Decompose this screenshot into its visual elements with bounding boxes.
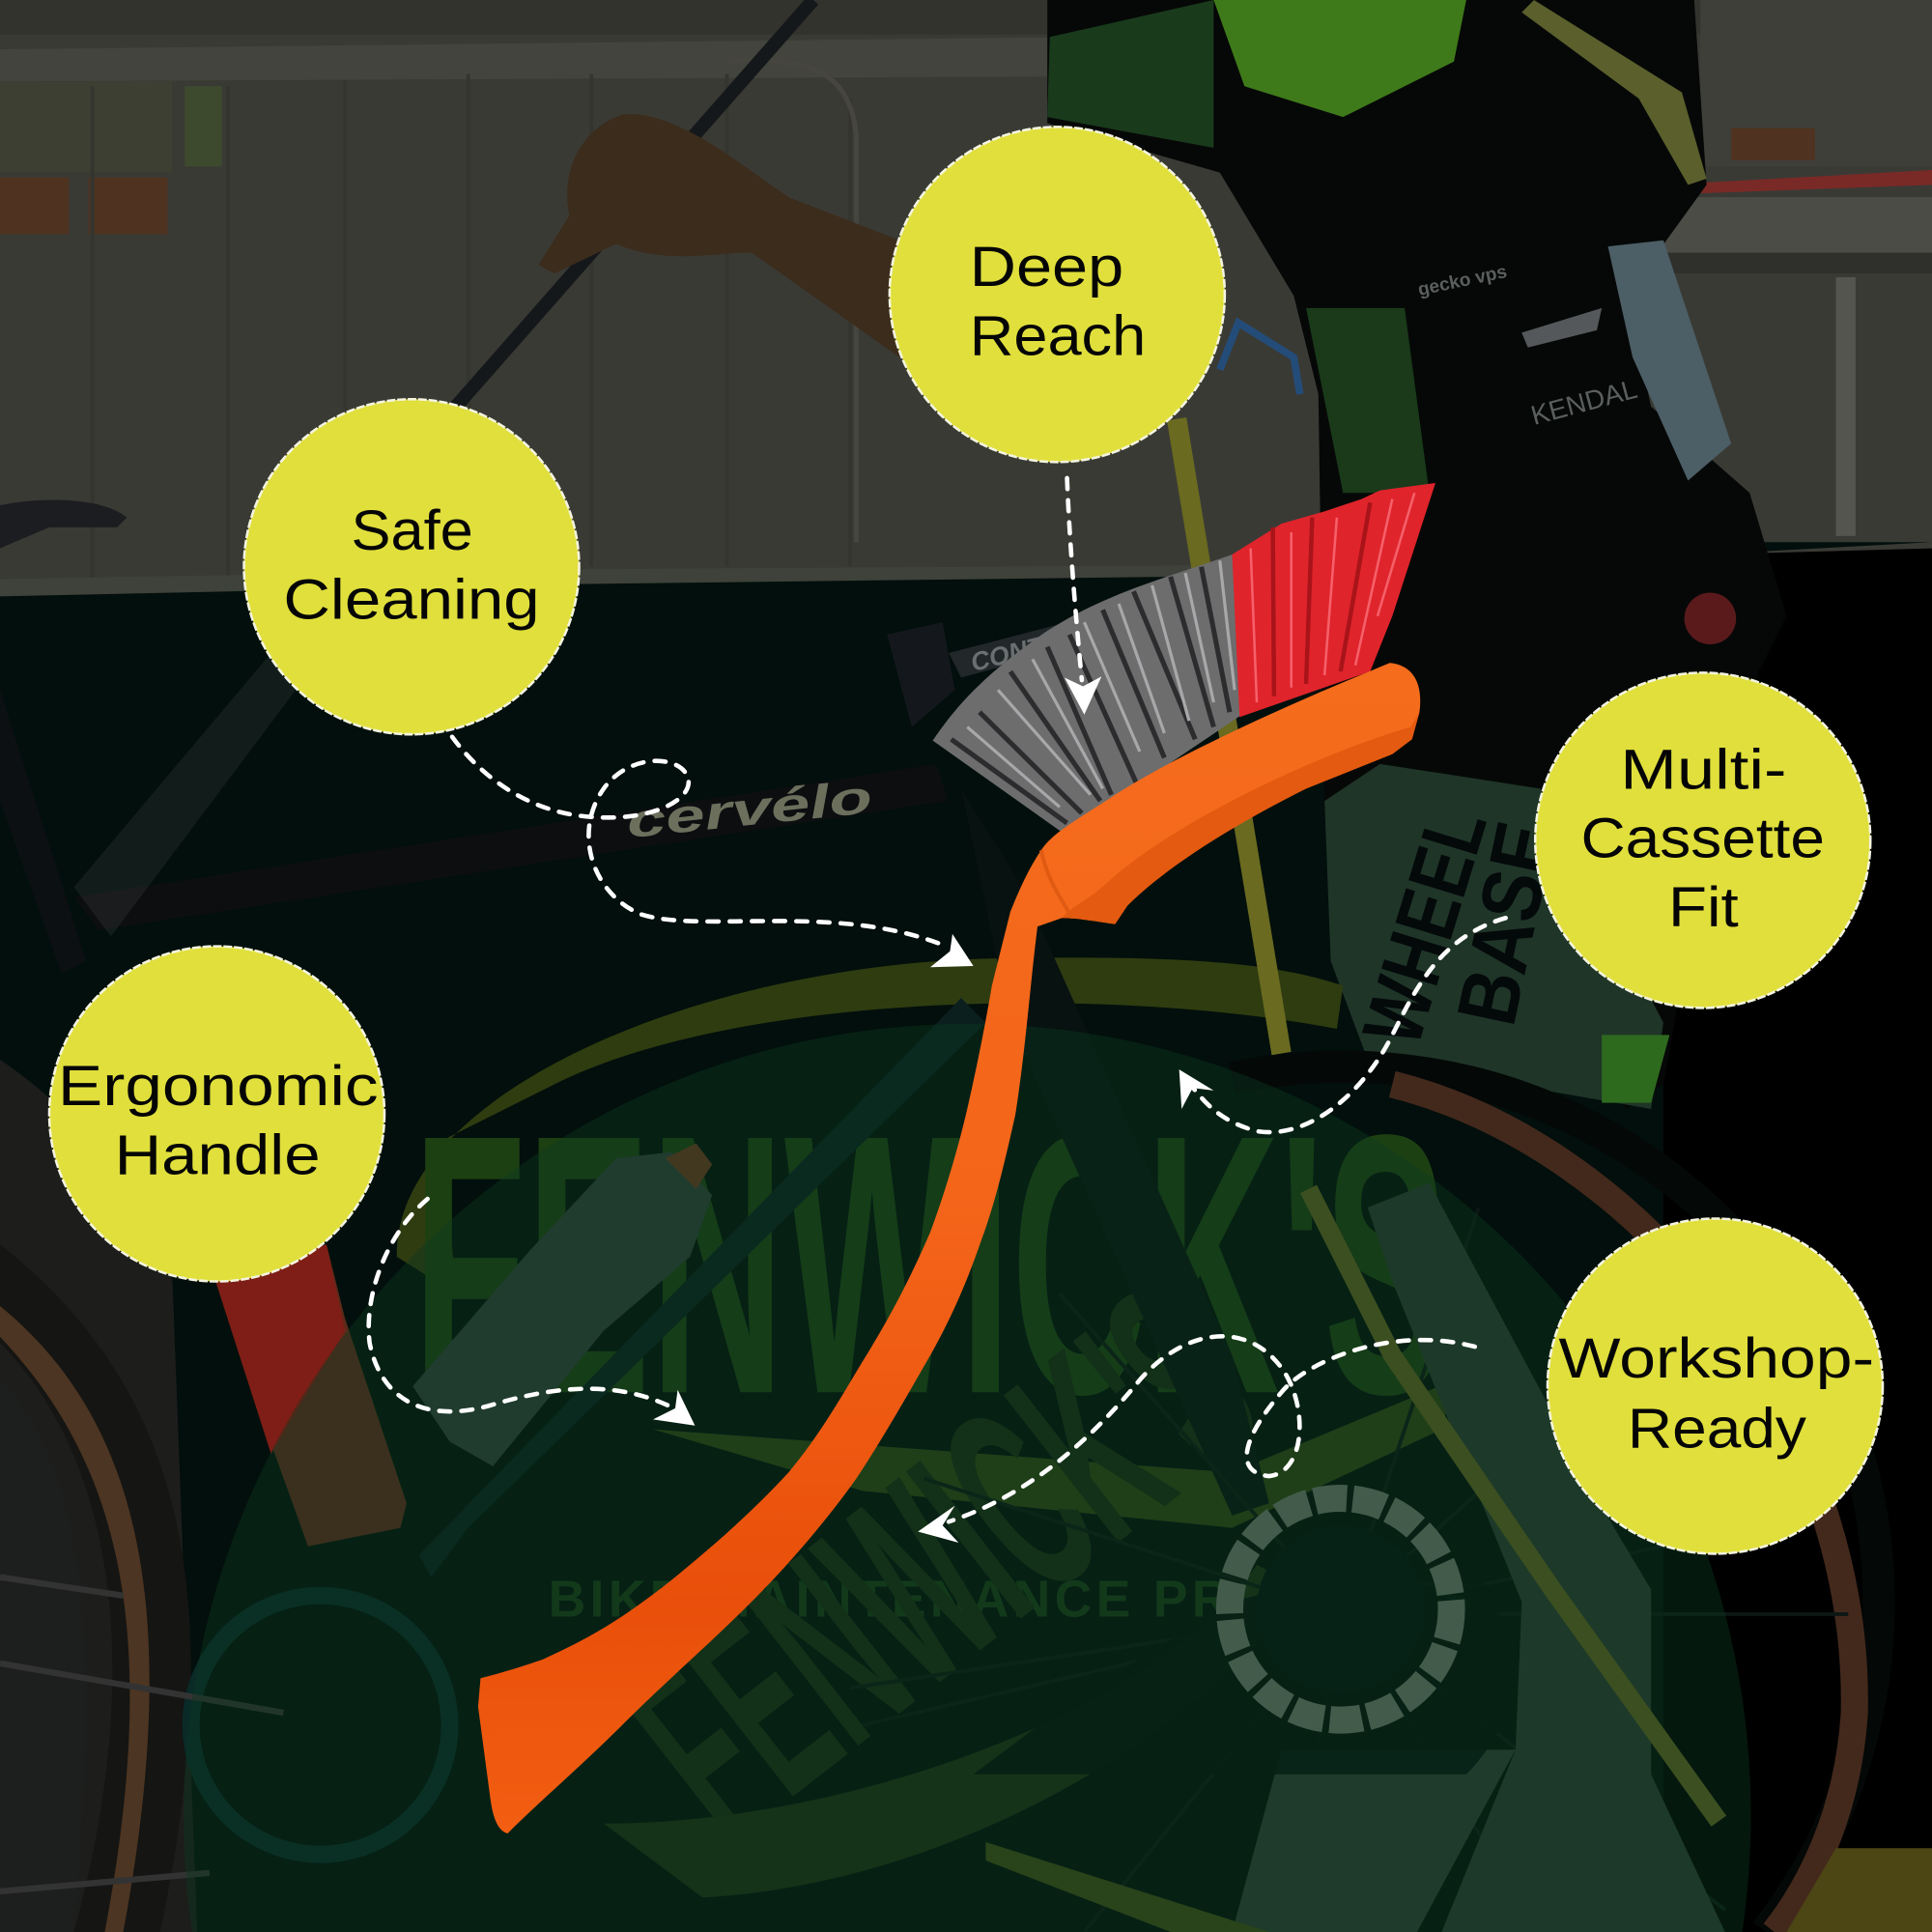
rider shorts xyxy=(1324,764,1663,1109)
white bottle xyxy=(412,1152,712,1466)
callout: Multi-Cassette Fit: Cassette xyxy=(1580,808,1825,870)
arrow: Ergonomic Handle to handle xyxy=(369,1199,695,1426)
rear wheel and drivetrain xyxy=(0,1244,191,1932)
background photo: fence, rider and bike: WHEEL xyxy=(1345,798,1505,1055)
callout: Deep Reach xyxy=(890,127,1225,462)
callout: Multi-Cassette Fit: Fit xyxy=(1668,876,1739,939)
front wheel xyxy=(850,1066,1879,1932)
bike frame xyxy=(74,764,949,930)
hand and arm xyxy=(538,114,899,357)
arrow: Multi-Cassette Fit to frame xyxy=(1179,918,1506,1132)
red bottle xyxy=(246,1244,407,1547)
background photo: fence, rider and bike: BIKE MAINTENANCE PRODUCTS xyxy=(549,1571,1472,1628)
shadow under hub xyxy=(974,1540,1516,1775)
rider torso xyxy=(1047,0,1786,1109)
callout: Deep Reach: Reach xyxy=(970,304,1146,367)
callout: Workshop-Ready xyxy=(1548,1218,1883,1553)
hose xyxy=(1177,419,1282,1054)
brake rotor xyxy=(1230,1498,1452,1720)
green overlay circle xyxy=(184,1024,1750,1932)
callout: Workshop-Ready: Workshop- xyxy=(1559,1327,1874,1390)
spray mist xyxy=(74,653,296,936)
callout: Safe Cleaning xyxy=(244,399,579,734)
callout: Ergonomic Handle xyxy=(49,947,384,1282)
callout: Ergonomic Handle: Handle xyxy=(115,1124,321,1187)
background photo: fence, rider and bike: gecko vps xyxy=(1416,262,1509,300)
brush xyxy=(478,483,1435,1833)
callout: Multi-Cassette Fit xyxy=(1535,672,1870,1008)
rider leg xyxy=(1368,1182,1725,1932)
grey bristles xyxy=(933,554,1242,835)
arrow: Workshop-Ready to handle xyxy=(918,1336,1475,1543)
mist around rear wheel xyxy=(0,1060,197,1932)
pole xyxy=(456,0,813,407)
background photo: fence, rider and bike: KENDAL xyxy=(1528,374,1640,431)
callout: Multi-Cassette Fit: Multi- xyxy=(1620,738,1786,801)
callout: Safe Cleaning: Safe xyxy=(352,499,473,562)
background photo: fence, rider and bike: BASE xyxy=(1439,814,1574,1033)
background photo: fence, rider and bike: FENWICK'S xyxy=(577,1231,1306,1894)
background photo: fence, rider and bike: CONTROL xyxy=(968,618,1099,677)
red bristles xyxy=(1233,483,1435,717)
logo arcs and letters xyxy=(397,957,1343,1293)
callout: Safe Cleaning: Cleaning xyxy=(283,568,540,631)
hydration tube xyxy=(1220,323,1300,394)
callout: Workshop-Ready: Ready xyxy=(1628,1398,1807,1461)
arrow: Safe Cleaning to brush neck xyxy=(440,719,974,967)
handle xyxy=(478,663,1420,1833)
callout: Deep Reach: Deep xyxy=(970,236,1123,298)
callout: Ergonomic Handle: Ergonomic xyxy=(58,1055,379,1118)
background photo: fence, rider and bike: cervélo xyxy=(624,771,874,848)
arrow: Deep Reach to bristles xyxy=(1065,478,1101,715)
